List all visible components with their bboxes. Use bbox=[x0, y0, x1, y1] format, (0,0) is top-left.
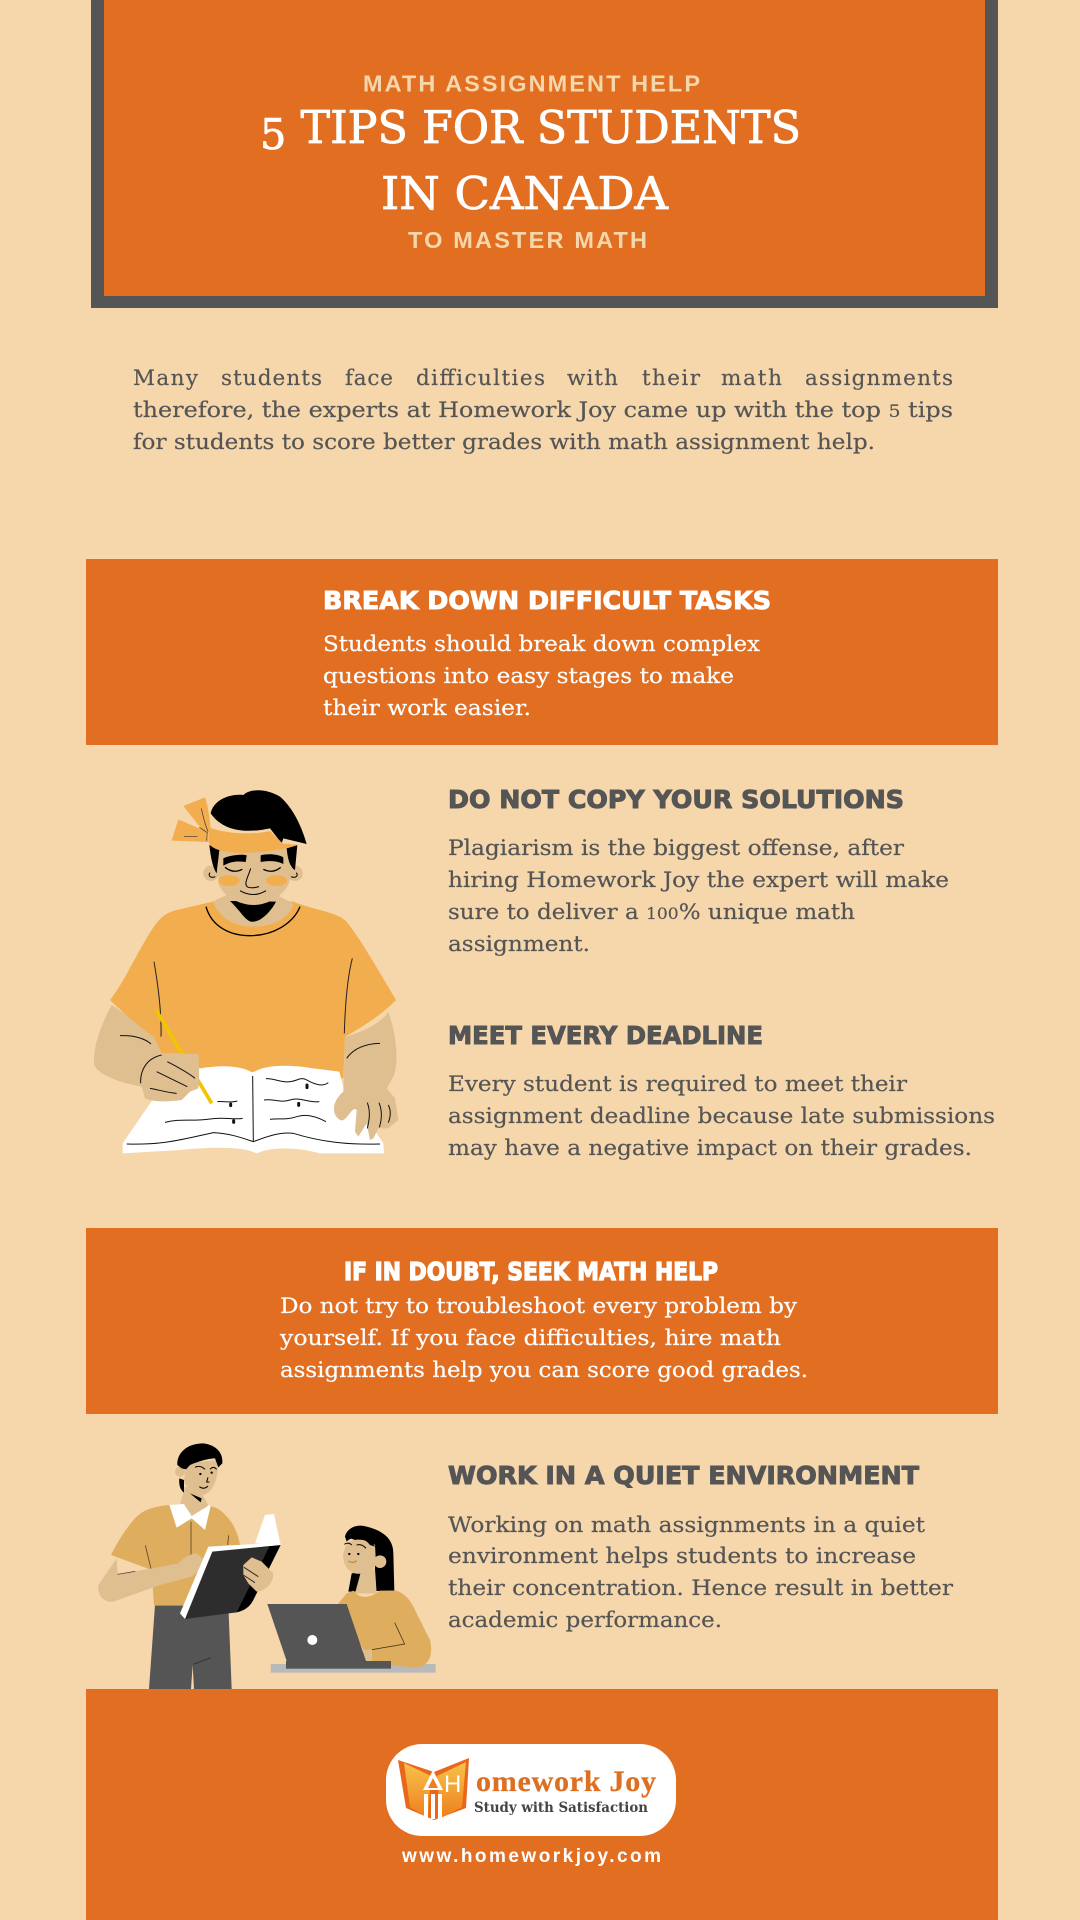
illustration: student writing in a book bbox=[94, 790, 398, 1153]
tip: do not copy your solutions bbox=[448, 785, 949, 957]
panel: break down difficult tasks bbox=[86, 559, 998, 745]
book bbox=[123, 1066, 384, 1153]
intro paragraph: assignments bbox=[805, 366, 953, 391]
headband bbox=[172, 797, 298, 853]
face bbox=[203, 843, 303, 905]
body text: sure to deliver a 100% unique math bbox=[448, 900, 855, 925]
body text: Working on math assignments in a quiet bbox=[448, 1513, 925, 1538]
subtitle: to master math: TO MASTER MATH bbox=[408, 227, 647, 253]
body text: their work easier. bbox=[323, 696, 531, 721]
body text: Do not try to troubleshoot every problem by bbox=[280, 1294, 798, 1319]
logo bbox=[386, 1744, 676, 1836]
heading: WORK IN A QUIET ENVIRONMENT bbox=[448, 1461, 919, 1490]
man's hand bbox=[243, 1557, 273, 1592]
laptop bbox=[267, 1604, 391, 1669]
right arm and hand bbox=[334, 1012, 398, 1140]
tip: work in a quiet environment bbox=[448, 1461, 954, 1633]
heading: DO NOT COPY YOUR SOLUTIONS bbox=[448, 785, 904, 814]
website url: www.homeworkjoy.com bbox=[401, 1846, 661, 1867]
man's head bbox=[175, 1443, 222, 1516]
body text bbox=[279, 1294, 808, 1383]
tip: meet every deadline bbox=[448, 1021, 995, 1161]
intro paragraph: their bbox=[642, 366, 701, 391]
title: 5 bbox=[260, 110, 286, 159]
body text bbox=[448, 836, 949, 957]
body text: their concentration. Hence result in better bbox=[448, 1576, 954, 1601]
body text: academic performance. bbox=[448, 1608, 722, 1633]
heading: MEET EVERY DEADLINE bbox=[448, 1021, 763, 1050]
heading: IF IN DOUBT, SEEK MATH HELP bbox=[344, 1257, 718, 1286]
body text: may have a negative impact on their grades. bbox=[448, 1136, 972, 1161]
heading: BREAK DOWN DIFFICULT TASKS bbox=[323, 586, 771, 615]
intro paragraph: therefore, the experts at Homework Joy came up with the top 5 tips bbox=[133, 398, 953, 423]
icon: open book with pencil: H bbox=[444, 1771, 461, 1798]
illustration: man with book and woman at laptop bbox=[98, 1443, 436, 1689]
intro paragraph: difficulties bbox=[416, 366, 545, 391]
intro paragraph: with bbox=[567, 366, 618, 391]
intro paragraph: for students to score better grades with math assignment help. bbox=[133, 430, 875, 455]
hair bbox=[211, 790, 307, 844]
body text: assignment deadline because late submissions bbox=[448, 1104, 995, 1129]
body text bbox=[448, 1072, 995, 1161]
body text: Students should break down complex bbox=[323, 632, 760, 657]
neck bbox=[213, 893, 293, 927]
intro paragraph: math bbox=[721, 366, 782, 391]
body text: environment helps students to increase bbox=[448, 1544, 916, 1569]
eyebrow: math assignment help: MATH ASSIGNMENT HELP bbox=[363, 70, 700, 96]
man's shirt bbox=[111, 1505, 241, 1606]
writing hand bbox=[141, 1053, 199, 1101]
man's arm bbox=[98, 1553, 208, 1602]
title: TIPS FOR STUDENTS bbox=[286, 101, 801, 154]
woman bbox=[338, 1526, 431, 1668]
header panel bbox=[91, 0, 998, 308]
open book bbox=[180, 1514, 281, 1619]
title bbox=[260, 101, 801, 220]
footer panel bbox=[86, 1689, 998, 1920]
body text: Every student is required to meet their bbox=[448, 1072, 908, 1097]
sleeve lines bbox=[154, 958, 352, 1037]
man's trousers bbox=[149, 1605, 232, 1689]
collar bbox=[169, 1504, 211, 1530]
shirt bbox=[110, 902, 396, 1078]
body text: yourself. If you face difficulties, hire math bbox=[279, 1326, 781, 1351]
body text: assignment. bbox=[448, 932, 590, 957]
logo wordmark: omework Joy bbox=[476, 1765, 656, 1798]
title: IN CANADA bbox=[381, 167, 669, 220]
body text: Plagiarism is the biggest offense, after bbox=[448, 836, 905, 861]
icon: open book with pencil bbox=[398, 1758, 469, 1820]
intro paragraph: students bbox=[221, 366, 322, 391]
logo tagline: Study with Satisfaction bbox=[474, 1800, 648, 1816]
intro paragraph bbox=[133, 366, 953, 455]
body text: assignments help you can score good grades. bbox=[280, 1358, 808, 1383]
body text bbox=[448, 1513, 954, 1633]
intro paragraph: face bbox=[345, 366, 393, 391]
intro paragraph: Many bbox=[133, 366, 199, 391]
pencil bbox=[156, 1010, 212, 1103]
panel: if in doubt bbox=[86, 1228, 998, 1414]
left arm bbox=[94, 1005, 162, 1087]
body text: questions into easy stages to make bbox=[323, 664, 734, 689]
body text: hiring Homework Joy the expert will make bbox=[448, 868, 949, 893]
table bbox=[271, 1664, 436, 1673]
body text bbox=[323, 632, 760, 721]
